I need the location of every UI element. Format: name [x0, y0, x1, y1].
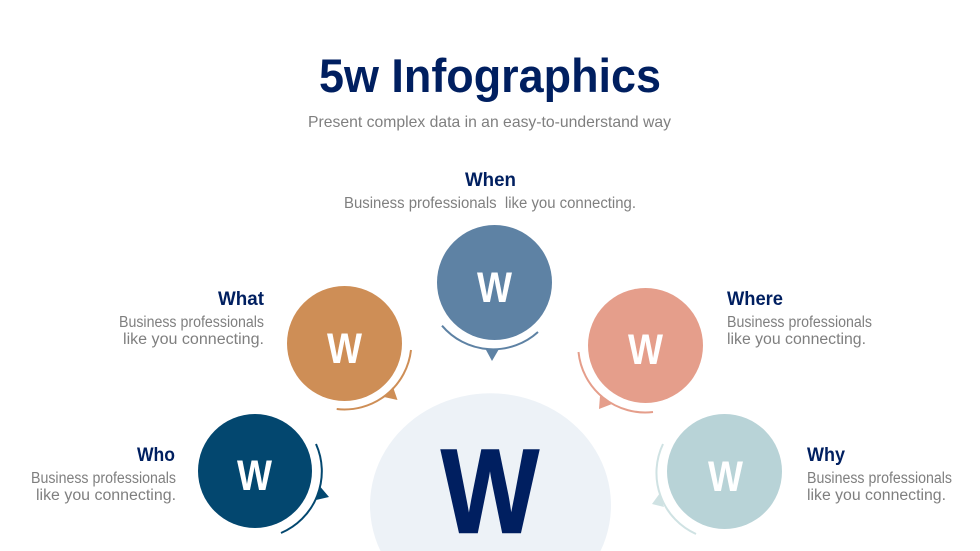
text block: When — [344, 170, 636, 212]
text block: When: Business professionals like you connecting. — [344, 195, 636, 212]
text block: What — [119, 289, 265, 348]
text block: What: What — [218, 289, 265, 310]
title: 5w Infographics — [319, 49, 661, 102]
icon: Who speech bubble: W — [237, 452, 272, 500]
icon: What speech bubble: W — [327, 325, 362, 373]
icon: Who speech bubble — [198, 414, 329, 533]
text block: Who: Who — [137, 445, 175, 466]
icon: Why speech bubble — [652, 414, 782, 534]
text block: What: like you connecting. — [123, 331, 264, 348]
text block: Where — [727, 289, 872, 348]
text block: When: When — [465, 170, 516, 191]
icon: Why speech bubble: W — [708, 453, 743, 501]
text block: Where: like you connecting. — [727, 331, 866, 348]
central circle with large W — [370, 393, 611, 551]
text block: Why — [807, 445, 952, 504]
subtitle: Present complex data in an easy-to-understand way — [308, 114, 671, 131]
text block: Why: Why — [807, 445, 845, 466]
text block: Who — [31, 445, 176, 504]
text block: What: Business professionals — [119, 314, 264, 331]
icon: What speech bubble — [287, 286, 411, 409]
icon: When speech bubble: W — [477, 264, 512, 312]
text block: Where: Where — [727, 289, 783, 310]
text block: Why: like you connecting. — [807, 487, 946, 504]
text block: Why: Business professionals — [807, 470, 952, 487]
text block: Where: Business professionals — [727, 314, 872, 331]
icon: Where speech bubble: W — [628, 326, 663, 374]
text block: Who: Business professionals — [31, 470, 176, 487]
icon: When speech bubble — [437, 225, 552, 361]
icon: Where speech bubble — [578, 288, 703, 412]
text block: Who: like you connecting. — [36, 487, 176, 504]
